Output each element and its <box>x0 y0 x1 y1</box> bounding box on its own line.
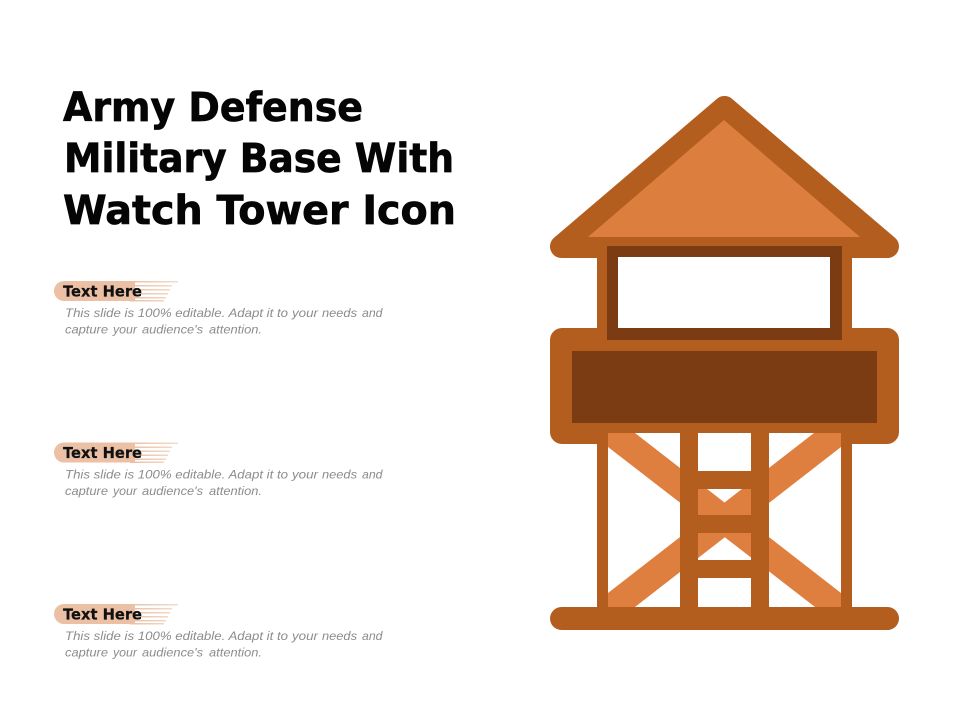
label pill 1: Text Here <box>63 282 142 300</box>
description 2: capture <box>65 484 108 498</box>
title <box>63 85 456 234</box>
description 2: needs <box>322 468 357 482</box>
description 3: your <box>112 646 138 660</box>
support frame opening <box>608 433 841 607</box>
description 3: attention. <box>209 646 262 660</box>
ladder <box>680 433 769 607</box>
description 3: audience's <box>142 646 203 660</box>
roof inner <box>588 120 860 237</box>
title: Military Base With <box>64 136 454 182</box>
label pill 1 <box>54 281 178 302</box>
description 2: your <box>112 484 138 498</box>
description 3: and <box>362 629 383 643</box>
cross braces <box>608 433 841 607</box>
description 1: and <box>362 306 383 320</box>
base beam <box>550 607 899 630</box>
description 2: and <box>362 468 383 482</box>
label pill 3: Text Here <box>63 606 142 624</box>
description 3: needs <box>322 629 357 643</box>
description 2: audience's <box>142 484 203 498</box>
label pill 2 <box>54 442 178 463</box>
description 1 <box>65 306 383 336</box>
description 2 <box>65 468 383 498</box>
window <box>607 246 842 340</box>
text block 1 <box>54 281 383 336</box>
icon: watch tower <box>550 108 899 630</box>
title: Watch Tower Icon <box>63 188 456 234</box>
description 3 <box>65 629 383 660</box>
roof outer <box>562 108 888 246</box>
platform <box>550 328 899 444</box>
description 1: your <box>112 322 138 336</box>
description 1: attention. <box>209 322 262 336</box>
description 3: capture <box>65 646 108 660</box>
description 1: your <box>291 306 319 320</box>
description 1: audience's <box>142 322 203 336</box>
description 1: This slide is 100% editable. Adapt it to <box>65 306 288 320</box>
text block 3 <box>54 604 383 660</box>
description 3: This slide is 100% editable. Adapt it to <box>65 629 288 643</box>
description 1: capture <box>65 322 108 336</box>
label pill 3 <box>54 604 178 624</box>
description 3: your <box>291 629 319 643</box>
description 2: attention. <box>209 484 262 498</box>
description 2: This slide is 100% editable. Adapt it to <box>65 468 288 482</box>
window frame <box>597 258 852 333</box>
description 2: your <box>291 468 319 482</box>
text block 2 <box>54 442 383 498</box>
label pill 2: Text Here <box>63 444 142 462</box>
title: Army Defense <box>63 85 363 131</box>
tower legs <box>597 250 852 612</box>
description 1: needs <box>322 306 357 320</box>
